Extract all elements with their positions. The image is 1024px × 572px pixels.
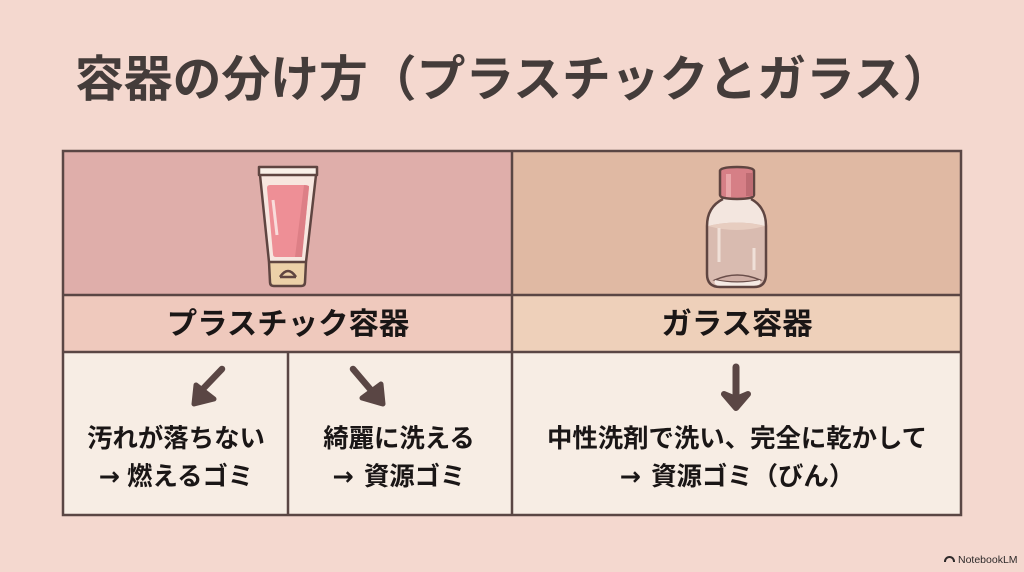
- arrow: down right: [350, 366, 386, 406]
- arrow: down left: [192, 366, 226, 406]
- text: clean plastic: → 資源ゴミ: [333, 460, 465, 490]
- text: glass instructions: → 資源ゴミ（びん）: [620, 460, 854, 490]
- panel: plastic image header: [63, 151, 512, 295]
- panel: glass image header: [512, 151, 961, 295]
- panel: plastic label band: [63, 295, 512, 352]
- text: dirty plastic: → 燃えるゴミ: [99, 460, 253, 490]
- text: glass instructions: 中性洗剤で洗い、完全に乾かして: [547, 424, 927, 452]
- icon: plastic tube: [258, 166, 318, 288]
- text: clean plastic: [323, 424, 475, 490]
- panel: glass label band: [512, 295, 961, 352]
- text: dirty plastic: [87, 424, 265, 490]
- text: clean plastic: 綺麗に洗える: [323, 424, 475, 452]
- icon: glass bottle: [706, 166, 768, 288]
- watermark: NotebookLM: NotebookLM: [958, 554, 1018, 566]
- arrow: down: [721, 364, 751, 411]
- panel: plastic clean outcome: [288, 352, 512, 515]
- panel: plastic dirty outcome: [63, 352, 288, 515]
- heading: plastic container: プラスチック容器: [167, 307, 409, 341]
- text: glass instructions: [547, 424, 927, 490]
- text: dirty plastic: 汚れが落ちない: [87, 424, 265, 452]
- heading: glass container: ガラス容器: [661, 307, 813, 341]
- panel: glass outcome: [512, 352, 961, 515]
- title: 容器の分け方（プラスチックとガラス）: [75, 53, 951, 107]
